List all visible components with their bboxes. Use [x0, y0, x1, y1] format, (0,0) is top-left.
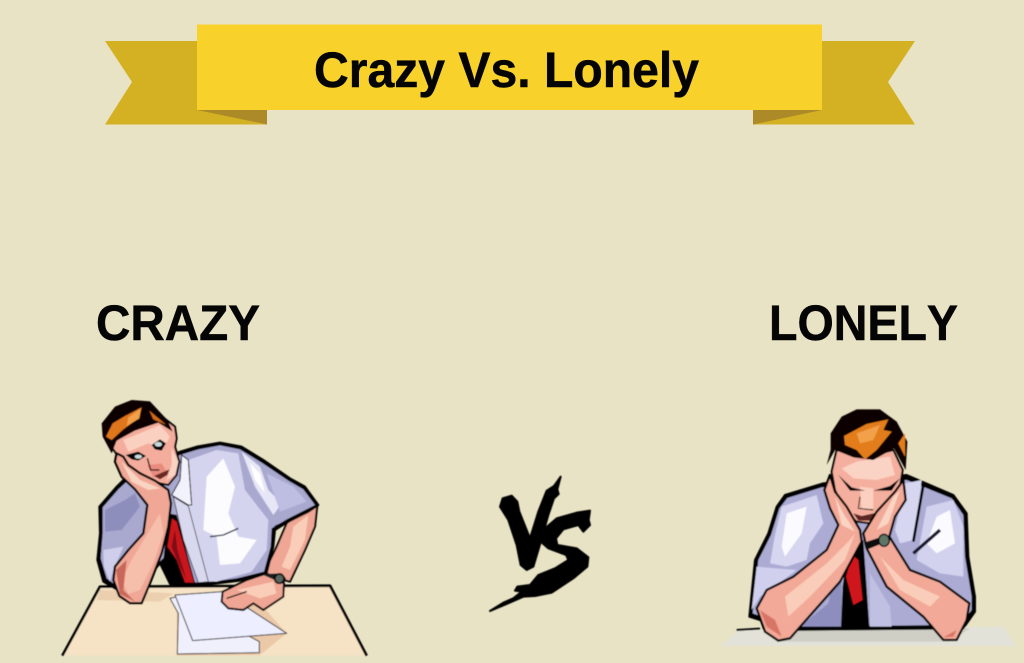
eyes and mouth: [838, 475, 865, 491]
wristwatch: [864, 537, 881, 550]
right arm: [863, 480, 969, 640]
heading: lonely: LONELY: [769, 295, 958, 351]
necktie: [841, 540, 869, 627]
banner left fold: [197, 110, 267, 124]
papers: [170, 597, 259, 654]
necktie: [163, 513, 195, 584]
banner right fold: [753, 110, 822, 124]
head: [827, 409, 907, 523]
hair: [827, 409, 907, 470]
shirt: [97, 443, 318, 592]
title banner: [105, 24, 915, 124]
banner main band: [197, 24, 822, 110]
hair: [102, 400, 173, 453]
desk: [62, 586, 367, 656]
left arm and hand on cheek: [113, 453, 171, 603]
illustration: lonely man at table: [721, 409, 1017, 646]
banner left tail: [105, 41, 267, 124]
letter S: [490, 511, 590, 611]
forearm highlight: [122, 513, 163, 594]
banner right tail: [753, 41, 915, 124]
icon: brush-stroke VS: [490, 477, 590, 611]
title text: Crazy Vs. Lonely: [314, 42, 699, 98]
eyes and mouth: [126, 452, 146, 461]
collar: [172, 455, 192, 505]
table: [721, 627, 1017, 646]
letter V: [500, 477, 561, 570]
wristwatch and hand on paper: [170, 573, 287, 654]
right forearm: [263, 505, 317, 582]
left arm: [757, 475, 862, 641]
heading: crazy: CRAZY: [96, 295, 260, 351]
illustration: crazy man at desk: [62, 400, 367, 656]
shirt: [749, 475, 975, 630]
head: [102, 400, 179, 485]
arms and hands: [757, 475, 969, 641]
